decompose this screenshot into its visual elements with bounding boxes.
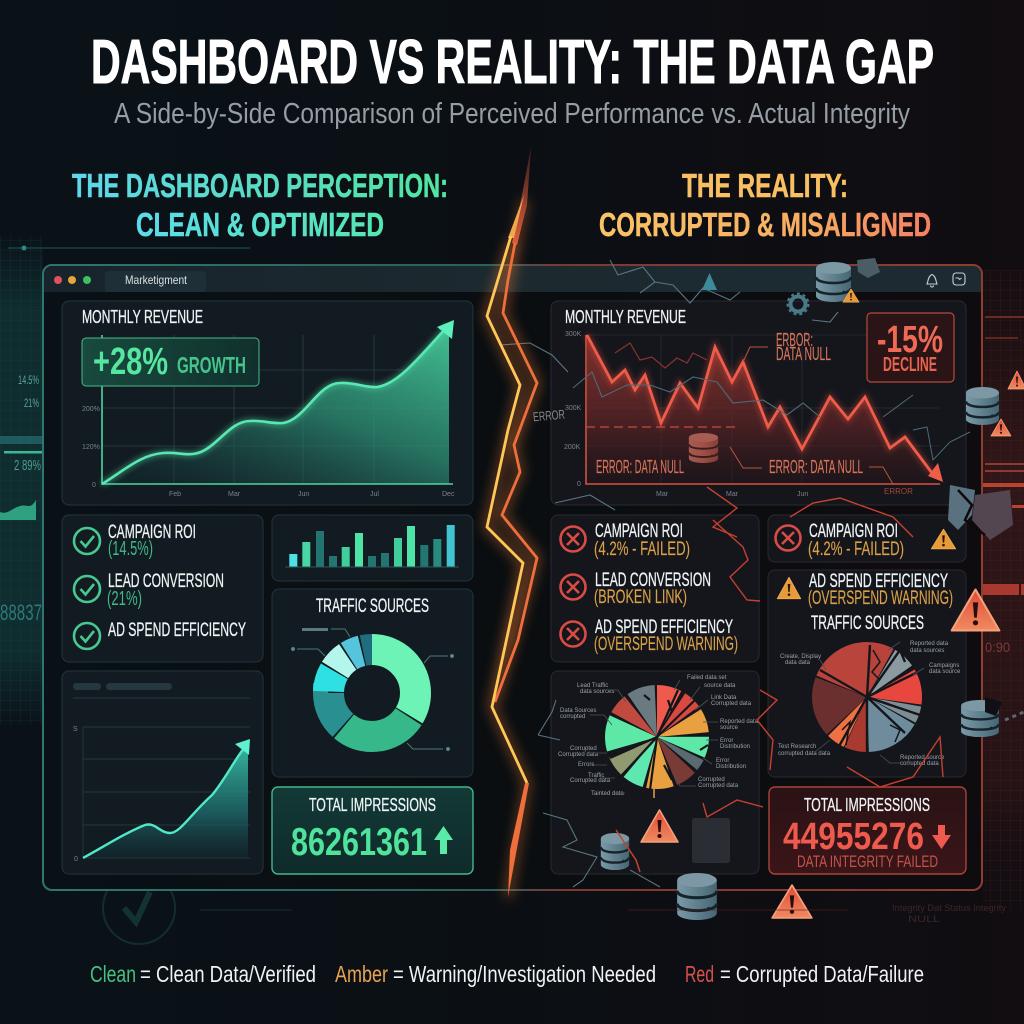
heading: traffic sources: TRAFFIC SOURCES [316,596,429,617]
text: ad spend warning: AD SPEND EFFICIENCY [809,571,948,592]
panel: small growth chart: 0 [74,856,78,863]
yellow bolt tip [508,195,524,238]
panel: broken pie chart [538,671,759,887]
text: campaign roi failed: (4.2% - FAILED) [808,539,904,560]
pie labels: Campaigns [929,663,959,669]
text: campaign roi failed [808,521,904,560]
text: campaign roi failed: (4.2% - FAILED) [594,539,690,560]
faint background text lower right [892,903,1007,924]
icon: warning teal [702,273,717,290]
pie labels: Reported data [910,641,949,647]
panel: failed campaign roi [768,515,966,562]
icons: floating database and warning debris [601,258,1024,920]
panel: traffic sources corrupted [768,570,966,777]
left background data panel: 21% [24,396,39,410]
axis labels: 300K [565,405,582,412]
panel: small growth chart [62,671,263,874]
icon: cross [560,526,586,552]
error annotations: ERROR: DATA NULL [596,457,684,477]
badge: +28% growth: GROWTH [177,352,246,378]
legend: Clean [90,961,136,987]
pie labels: data sources [910,648,944,654]
red and grey crack lines [500,260,943,817]
pie labels: Failed data set [687,675,727,681]
heading: the reality: THE REALITY: [682,167,848,204]
badge: -15% decline: DECLINE [883,354,937,376]
pie labels: Errors [578,762,594,768]
pie labels: corrupted data [900,761,939,767]
pie labels: data source [929,669,961,675]
cracks [538,700,660,887]
pie labels: Distribution [720,744,750,750]
heading: dashboard perception: CLEAN & OPTIMIZED [136,206,384,243]
axis labels: Feb [169,491,181,498]
axis labels: ERROR [884,487,913,496]
legend: = Corrupted Data/Failure [720,961,924,987]
icon: cross [560,622,586,646]
icon: cross [776,526,800,550]
icon: down arrow [932,825,951,849]
icon: warning right upper [1008,371,1024,389]
error annotations: DATA NULL [776,344,831,364]
legend: Amber [335,961,388,987]
pie labels: Corrupted data [711,701,752,707]
background check emblem [103,872,292,944]
panel: bar chart [272,515,473,581]
text: lead conversion broken [594,570,711,608]
broken fragment top [857,258,880,278]
icon: red database [689,433,718,463]
heading: the reality [599,167,931,243]
yellow bolt [487,236,527,783]
icon: warning right lower [991,419,1011,436]
dashboard window [43,265,982,890]
text: lead conversion broken: (BROKEN LINK) [594,587,687,608]
decline area chart [573,335,970,484]
small area chart [83,739,250,858]
icon: broken block [948,485,1013,540]
text: campaign roi failed [594,521,690,560]
panel: clean total impressions [272,787,473,874]
heading: monthly revenue: MONTHLY REVENUE [565,307,686,327]
text: lead conversion: (21%) [107,588,142,610]
dashboard window: Marketigment [125,273,188,287]
bars [285,525,459,567]
icon: warning [777,577,801,599]
pie labels [558,675,759,797]
badge: -15% decline: -15% [877,319,943,361]
pie labels: data data [785,660,811,666]
dark placeholder widget [692,818,730,863]
panel: clean monthly revenue [62,301,473,505]
orange bolt [495,243,537,702]
badge: -15% decline [867,313,954,382]
left background data panel: 2 89% [14,457,41,474]
error annotations: ERROR: DATA NULL [769,457,863,477]
heading: dashboard perception: THE DASHBOARD PERCEPTION: [72,167,448,204]
tapered bolt tip [512,147,531,245]
pie labels: Data Sources [560,708,596,714]
error annotations: ERBOR: [776,330,813,350]
pie labels: Corrupted data [570,778,611,784]
axis labels: Mar [228,491,241,498]
icon: gear [788,294,808,314]
pie labels: Error [716,758,729,764]
lower orange tail [508,783,529,897]
pie labels: Tainted data [591,791,624,797]
icon: warning top [843,289,859,302]
text: campaign roi: (14.5%) [108,538,153,560]
donut leader lines [291,628,454,751]
text: lead conversion broken: LEAD CONVERSION [595,570,711,591]
icon: warning [641,810,678,842]
pie labels: Corrupted [698,777,725,783]
icon: broken database [961,697,1024,737]
icon: check [74,576,100,602]
fragmented pie chart [610,690,708,798]
text: campaign roi failed: CAMPAIGN ROI [809,521,898,542]
icon: up arrow [434,826,453,854]
icon: check [74,623,100,649]
label: data integrity failed: DATA INTEGRITY FAILED [797,852,938,871]
label: total impressions: TOTAL IMPRESSIONS [309,794,436,815]
axis labels: Jun [797,491,808,498]
panel: clean KPI checklist [62,515,263,662]
error annotations [596,330,893,484]
pie labels: Corrupted [570,746,597,752]
icon: database lower [601,830,640,872]
shattered pie chart [820,645,920,752]
panel: failed KPI checklist [551,515,759,662]
axis labels [564,331,913,498]
text: campaign roi failed: CAMPAIGN ROI [595,521,683,542]
axis labels: Mar [656,491,669,498]
pie labels: Error [720,738,733,744]
icon: cross [560,574,586,600]
icon: database bottom [677,873,717,920]
donut chart [328,650,416,736]
panel: corrupted total impressions [769,787,966,874]
icon: check [74,528,100,554]
pie labels: Reported data [720,719,759,725]
faint background text lower right: NULL [908,914,940,924]
value: 44955276: 44955276 [783,816,924,858]
panel: clean traffic sources [272,589,473,777]
pie labels: source data [704,683,736,689]
axis labels: Jun [298,491,309,498]
axis labels: 0 [577,481,581,488]
text: lead conversion [107,571,224,610]
axis labels: 200% [82,406,100,413]
axis labels: 300K [565,331,582,338]
icon: database right [966,387,999,425]
pie labels: Link Data [711,695,737,701]
axis labels: 0 [92,482,96,489]
left background data panel: 88837 [0,600,42,625]
growth area chart [102,320,454,484]
legend [90,961,924,987]
axis labels: 120% [82,444,100,451]
faded error label: ERROR [532,407,566,424]
pie labels [778,641,961,767]
text: ad spend warning: (OVERSPEND WARNING) [594,634,738,655]
axis labels [82,406,455,498]
icon: warning [931,529,956,549]
legend: = Warning/Investigation Needed [393,961,656,987]
icon: warning bottom [772,885,812,918]
pie labels: Create, Display [780,654,821,660]
legend: = Clean Data/Verified [140,961,316,987]
right background data panel [983,270,1024,910]
heading: traffic sources: TRAFFIC SOURCES [811,613,924,634]
pie labels: Corrupted data [698,783,739,789]
right background data panel: 0:90 [985,639,1010,655]
icon: big warning [952,590,999,630]
badge: +28% growth: +28% [93,341,168,383]
text: lead conversion: LEAD CONVERSION [108,571,224,592]
icon: database top [816,262,851,302]
left background data panel: 14.5% [18,373,39,387]
badge: +28% growth [82,338,259,386]
panel: small growth chart: S [73,726,78,733]
pie labels: Distribution [716,764,746,770]
text: ad spend warning: AD SPEND EFFICIENCY [595,617,733,638]
heading: dashboard perception [72,167,448,243]
text: campaign roi: CAMPAIGN ROI [108,522,196,543]
heading: monthly revenue: MONTHLY REVENUE [82,307,203,327]
pie labels: Traffic [588,773,604,779]
text: ad spend warning [594,617,738,655]
axis labels: Jul [370,491,379,498]
left background data panel [0,235,250,725]
value: 86261361: 86261361 [291,821,427,864]
pie labels: Lead Traffic [577,683,608,689]
pie labels: Reported source [900,755,945,761]
pie labels: data sources [580,689,614,695]
faint background text lower right: Integrity Dat Status Integrity [892,903,1007,913]
legend: Red [685,961,714,987]
axis labels: Mar [726,491,739,498]
pie labels: corrupted [560,714,585,720]
pie labels: Test Research [778,744,816,750]
lightning bolt divider [487,147,537,897]
pie labels: corrupted data data [778,751,831,757]
text: campaign roi [108,522,196,560]
pie labels: Corrupted data [558,752,599,758]
text: ad spend efficiency: AD SPEND EFFICIENCY [108,620,246,641]
pie labels: source [720,725,739,731]
axis labels: 200K [564,444,581,451]
panel: corrupted monthly revenue [551,301,970,505]
axis labels: Dec [442,491,455,498]
label: total impressions: TOTAL IMPRESSIONS [804,794,930,815]
text: ad spend warning [808,571,953,609]
